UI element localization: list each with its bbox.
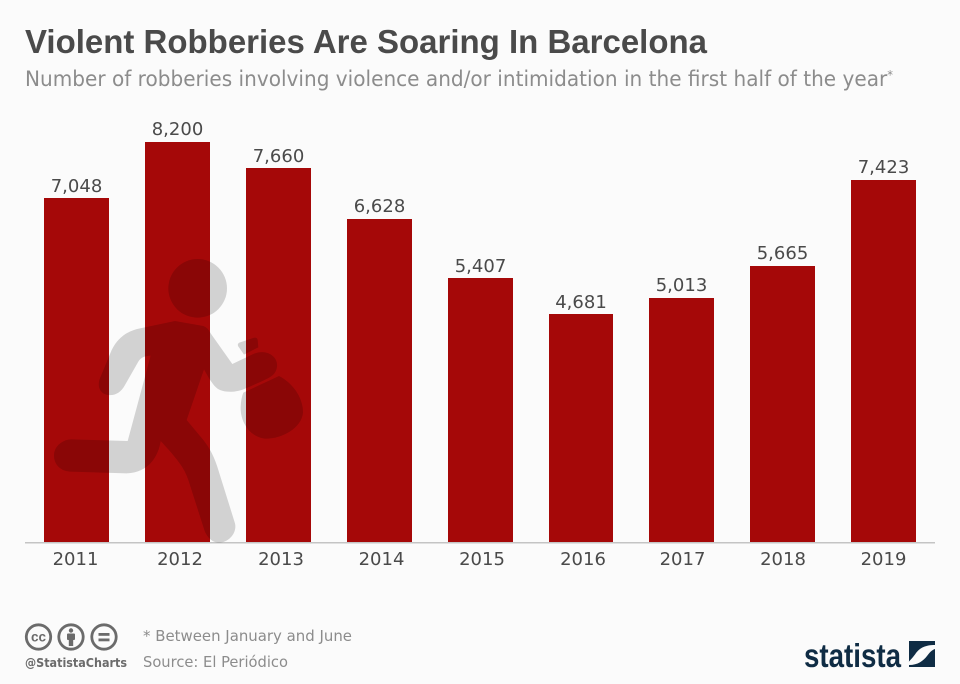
value labels xyxy=(51,119,909,313)
year labels: 2016 xyxy=(560,549,606,570)
value labels: 4,681 xyxy=(555,292,607,313)
handle: @StatistaCharts xyxy=(25,656,127,670)
no derivatives circle xyxy=(92,625,116,649)
year labels: 2013 xyxy=(258,549,304,570)
year labels: 2014 xyxy=(359,549,404,570)
title: Violent Robberies Are Soaring In Barcelona xyxy=(25,23,708,60)
source: Source: El Periódico xyxy=(143,653,288,671)
value labels: 5,407 xyxy=(455,256,506,277)
footnote: * Between January and June xyxy=(143,627,352,645)
axis line xyxy=(25,542,935,544)
wordmark: statista xyxy=(804,637,902,674)
bar chart xyxy=(25,119,935,570)
attribution circle xyxy=(59,625,83,649)
logo mark xyxy=(909,641,935,667)
value labels: 7,660 xyxy=(253,146,304,167)
year labels: 2015 xyxy=(459,549,505,570)
value labels: 8,200 xyxy=(152,119,203,140)
year labels: 2017 xyxy=(660,549,705,570)
year labels: 2018 xyxy=(760,549,806,570)
value labels: 6,628 xyxy=(354,196,405,217)
value labels: 7,048 xyxy=(51,176,102,197)
value labels: 5,665 xyxy=(757,243,808,264)
year labels: 2012 xyxy=(157,549,203,570)
year labels: 2011 xyxy=(53,549,98,570)
year labels: 2019 xyxy=(861,549,906,570)
icon: cc license xyxy=(26,625,116,649)
value labels: 7,423 xyxy=(858,157,909,178)
cc circle: cc xyxy=(31,630,46,644)
subtitle: Number of robberies involving violence and/or intimidation in the first half of the year xyxy=(25,67,928,91)
value labels: 5,013 xyxy=(656,275,707,296)
icon: running robber with bag xyxy=(54,259,303,543)
bars xyxy=(44,142,916,542)
year labels xyxy=(53,549,906,570)
statista logo xyxy=(804,637,935,674)
subtitle: * xyxy=(887,68,893,82)
